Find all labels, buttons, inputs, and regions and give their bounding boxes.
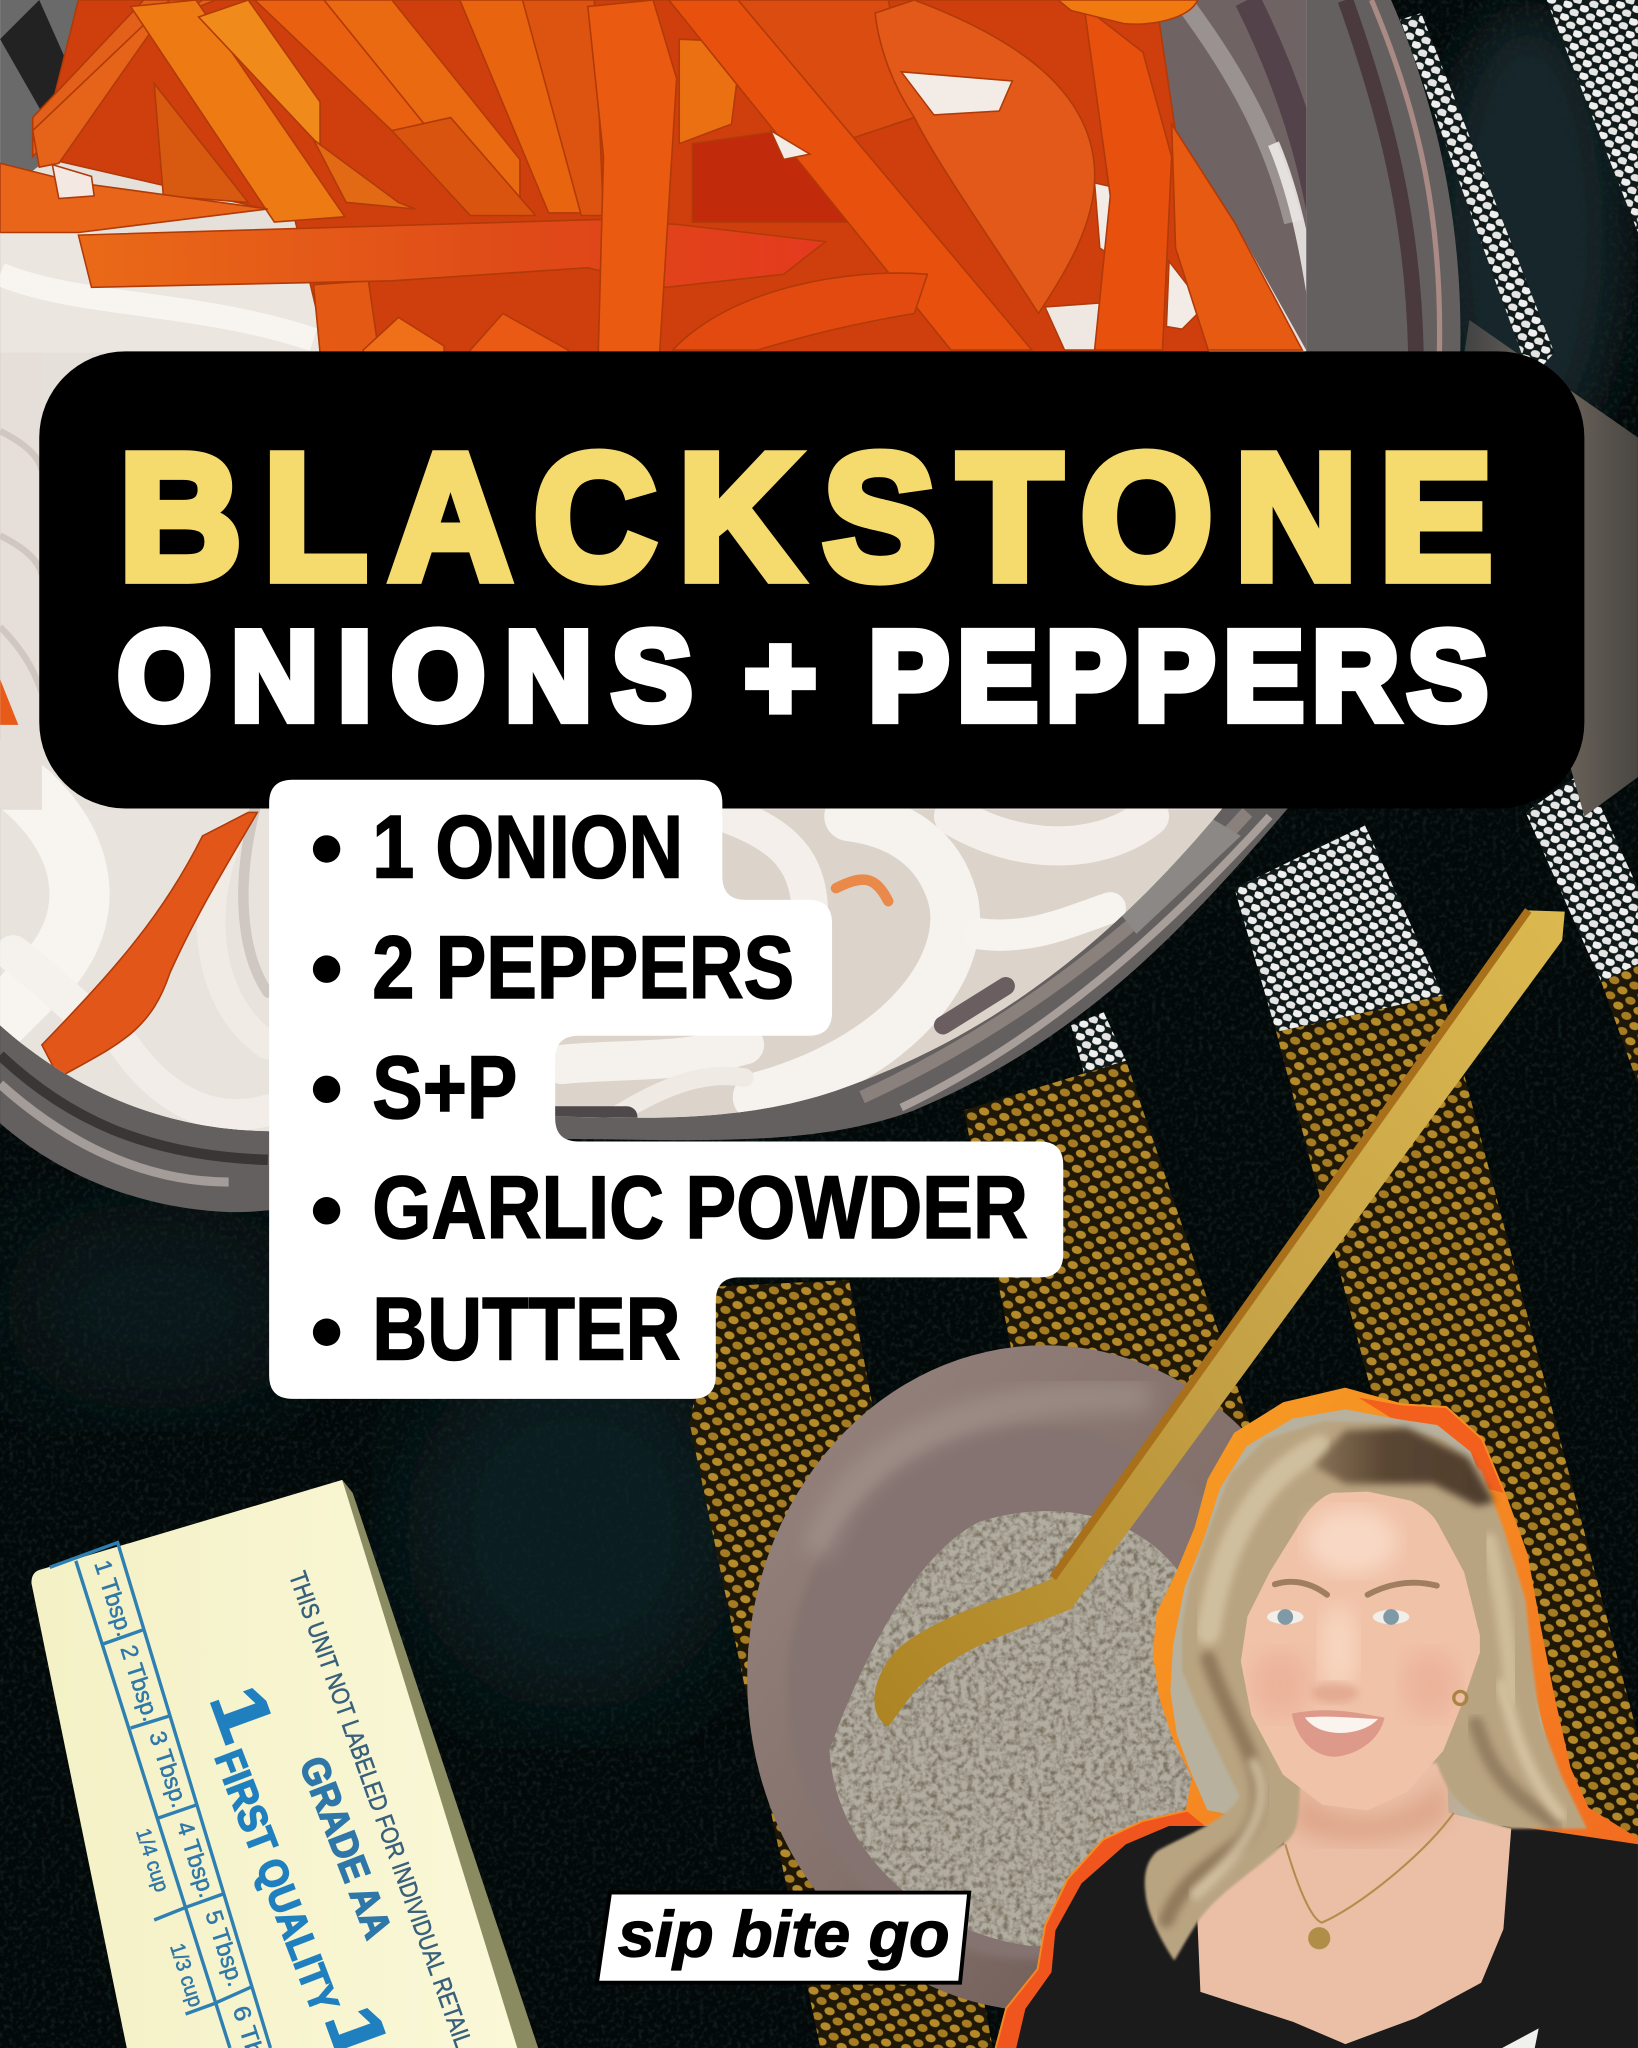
ingredient lines: 1 ONION	[372, 798, 683, 897]
butter measurement labels: 3 Tbsp.	[144, 1728, 193, 1811]
butter label text: GRADE AA	[291, 1751, 399, 1945]
butter measurement labels: 1/4 cup	[131, 1826, 173, 1895]
white collar detail	[1502, 2028, 1539, 2048]
ingredient bullets	[313, 835, 340, 1346]
butter measurement labels	[89, 1557, 269, 2048]
ingredient lines	[372, 798, 1028, 1379]
portrait with orange cut-out outline	[997, 1390, 1638, 2048]
butter measurement grid	[50, 1543, 270, 2048]
ingredient lines: BUTTER	[372, 1280, 681, 1379]
glass bowl with peppers and onions	[0, 0, 1638, 1212]
butter label text: 1	[193, 1675, 291, 1753]
logo: sip bite go: sip bite go	[618, 1898, 950, 1971]
earring	[1454, 1691, 1467, 1704]
butter measurement labels: 4 Tbsp.	[172, 1818, 221, 1901]
butter measurement labels: 2 Tbsp.	[115, 1642, 164, 1724]
butter label text	[193, 1568, 476, 2048]
inner glass wall of the bowl	[1160, 0, 1306, 350]
neck and chest	[1196, 1750, 1511, 2044]
butter measurement labels: 5 Tbsp.	[200, 1907, 249, 1990]
ingredients list panel	[269, 780, 1063, 1399]
eyebrows	[1275, 1582, 1437, 1595]
butter label text: FIRST QUALITY	[206, 1743, 348, 2018]
butter measurement labels: 1/3 cup	[165, 1941, 207, 2010]
face	[1242, 1493, 1479, 1809]
smile	[1292, 1710, 1385, 1757]
eyes	[1267, 1609, 1409, 1625]
salt mix	[829, 1511, 1215, 1946]
cloth stripes	[690, 0, 1638, 2048]
title panel	[39, 351, 1584, 808]
black top	[1016, 1826, 1638, 2048]
blond hair	[1145, 1421, 1587, 1960]
stick of butter	[31, 1480, 538, 2048]
dark hair roots	[1314, 1428, 1494, 1506]
subtitle: Onions + Peppers: PEPPERS	[869, 606, 1488, 747]
neck shadow under the chin	[1293, 1776, 1449, 1842]
small seasoning bowl with salt and pepper	[747, 1345, 1343, 2011]
spoon	[874, 910, 1565, 1727]
subtitle: Onions + Peppers: ONIONS	[118, 606, 692, 747]
butter measurement labels: 1 Tbsp.	[89, 1557, 138, 1640]
ingredient lines: GARLIC POWDER	[372, 1158, 1028, 1257]
gold necklace	[1285, 1813, 1454, 1949]
subtitle: Onions + Peppers: +	[745, 610, 816, 747]
ingredient lines: S+P	[372, 1038, 517, 1137]
bowl food contents	[0, 0, 1352, 1149]
metal handle behind bowl	[1460, 320, 1638, 816]
pale onion slices, lower bowl	[0, 771, 1306, 1149]
dark corner of the bowl	[0, 0, 78, 171]
ingredient lines: 2 PEPPERS	[372, 918, 794, 1017]
subtitle: Onions + Peppers	[118, 606, 1488, 747]
pepper strips	[0, 0, 1302, 1078]
pale onion, upper left	[0, 233, 1, 352]
beige photo background	[1172, 1411, 1574, 1829]
title: Blackstone: BLACKSTONE	[119, 417, 1493, 617]
